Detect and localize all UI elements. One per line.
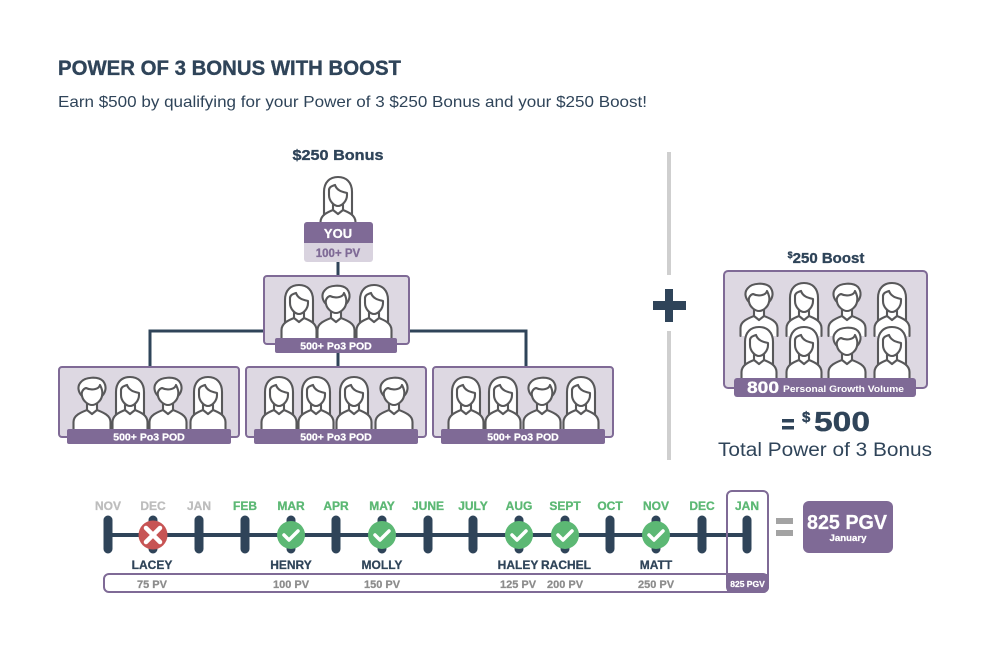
total: $500 (782, 406, 870, 437)
timeline track (108, 533, 747, 537)
member names: MOLLY (362, 558, 402, 572)
subtitle: Earn $500 by qualifying for your Power of 3 $250 Bonus and your $250 Boost! (58, 94, 647, 111)
month labels: DEC (689, 499, 715, 513)
total: $500: $ (802, 409, 811, 426)
PV total bar: 100 PV (273, 579, 310, 591)
PV total bar: 75 PV (137, 579, 168, 591)
equals sign (776, 518, 793, 536)
month labels: FEB (233, 499, 257, 513)
panel: boost (724, 271, 927, 397)
member names: RACHEL (541, 558, 591, 572)
month labels: MAY (369, 499, 395, 513)
you: person and badge: 100+ PV (316, 248, 361, 260)
month labels: SEPT (549, 499, 581, 513)
panel: top Po3 pod (264, 276, 409, 353)
month labels: NOV (95, 499, 121, 513)
panel: top Po3 pod: 500+ Po3 POD (300, 340, 372, 352)
you: person and badge: YOU (324, 226, 352, 241)
month ticks (108, 520, 747, 549)
PV total bar: 125 PV (500, 579, 537, 591)
result: 825 PGV: 825 PGV (807, 512, 888, 534)
member names (132, 558, 673, 572)
month labels: JAN (735, 499, 759, 513)
month labels: AUG (506, 499, 532, 513)
icons: qualified months (277, 521, 670, 549)
icon: missed month (138, 520, 168, 550)
heading: $250 Boost: $ (788, 250, 793, 260)
title: POWER OF 3 BONUS WITH BOOST (58, 57, 401, 80)
month labels: JULY (458, 499, 488, 513)
month labels: DEC (140, 499, 166, 513)
panel: right Po3 pod: 500+ Po3 POD (487, 432, 559, 444)
month labels: JAN (187, 499, 211, 513)
result: 825 PGV (803, 501, 893, 553)
month labels: APR (323, 499, 349, 513)
panel: middle Po3 pod (246, 367, 426, 444)
January highlight box (727, 491, 768, 592)
panel: boost: 800 (747, 378, 779, 397)
heading: $250 Boost: 250 Boost (793, 250, 864, 267)
member names: MATT (640, 558, 673, 572)
panel: left Po3 pod (59, 367, 239, 444)
month labels: NOV (643, 499, 669, 513)
panel: boost: Personal Growth Volume (783, 384, 904, 395)
PV total bar (104, 574, 768, 592)
member names: HENRY (270, 558, 312, 572)
month labels: MAR (277, 499, 305, 513)
PV total bar: 250 PV (638, 579, 675, 591)
panel: right Po3 pod (433, 367, 613, 444)
January highlight box: 825 PGV (730, 579, 765, 589)
heading: $250 Bonus: $250 Bonus (292, 147, 384, 164)
month labels: OCT (597, 499, 623, 513)
timeline (95, 491, 768, 592)
connector lines (150, 258, 526, 367)
PV total bar: 150 PV (364, 579, 401, 591)
you: person and badge (304, 177, 373, 262)
member names: HALEY (498, 558, 538, 572)
month labels: JUNE (412, 499, 444, 513)
month labels (95, 499, 759, 513)
member names: LACEY (132, 558, 172, 572)
divider with plus sign (653, 152, 686, 460)
total: $500: 500 (814, 406, 870, 437)
PV total bar: 200 PV (547, 579, 584, 591)
total caption: Total Power of 3 Bonus (718, 440, 932, 461)
panel: middle Po3 pod: 500+ Po3 POD (300, 432, 372, 444)
result: 825 PGV: January (830, 533, 866, 543)
panel: left Po3 pod: 500+ Po3 POD (113, 432, 185, 444)
